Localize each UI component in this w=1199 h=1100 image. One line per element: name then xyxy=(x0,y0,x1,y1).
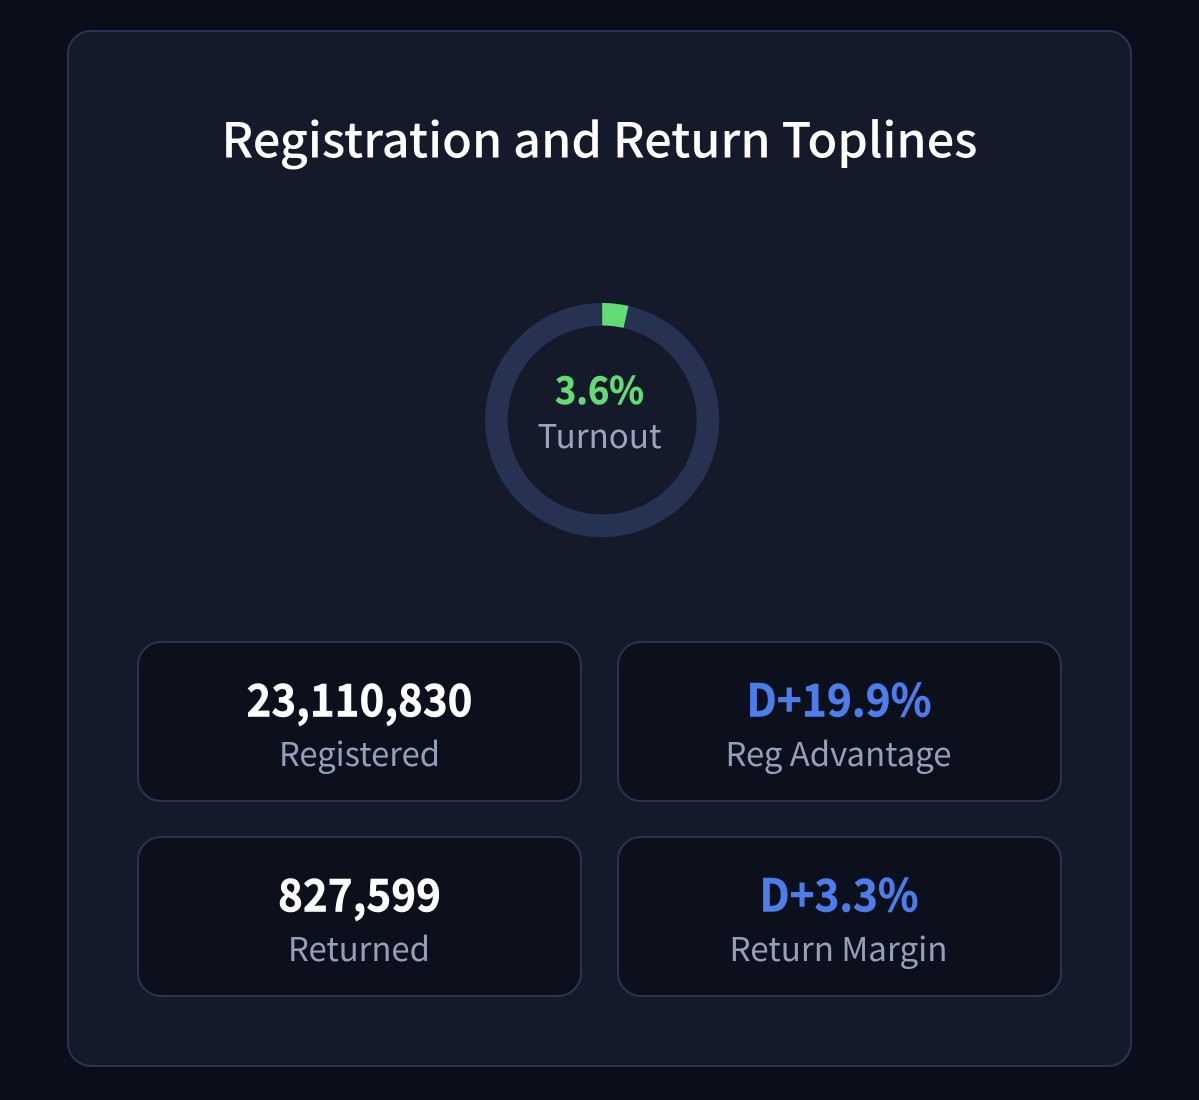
stat: returned xyxy=(278,860,441,971)
title: Registration and Return Toplines xyxy=(222,102,978,172)
stat: returned: Returned xyxy=(288,923,430,971)
stat: registration advantage: Reg Advantage xyxy=(726,728,952,776)
stat card background: returned xyxy=(137,836,582,997)
donut chart: turnout: 3.6% xyxy=(555,360,644,415)
stat: registration advantage: D+19.9% xyxy=(746,664,932,730)
stat: registered: Registered xyxy=(279,728,440,776)
stat: returned: 827,599 xyxy=(278,860,441,924)
stat card background: registered xyxy=(137,641,582,802)
stat: return margin xyxy=(730,860,948,971)
donut chart: turnout xyxy=(496,314,708,526)
stat: return margin: D+3.3% xyxy=(760,860,918,924)
stat: registered xyxy=(246,664,472,776)
stat: return margin: Return Margin xyxy=(730,923,948,971)
donut chart: turnout: Turnout xyxy=(538,410,662,458)
stat card background: return margin xyxy=(617,836,1062,997)
stat: registration advantage xyxy=(726,664,952,776)
stat card background: registration advantage xyxy=(617,641,1062,802)
stat: registered: 23,110,830 xyxy=(246,664,472,730)
